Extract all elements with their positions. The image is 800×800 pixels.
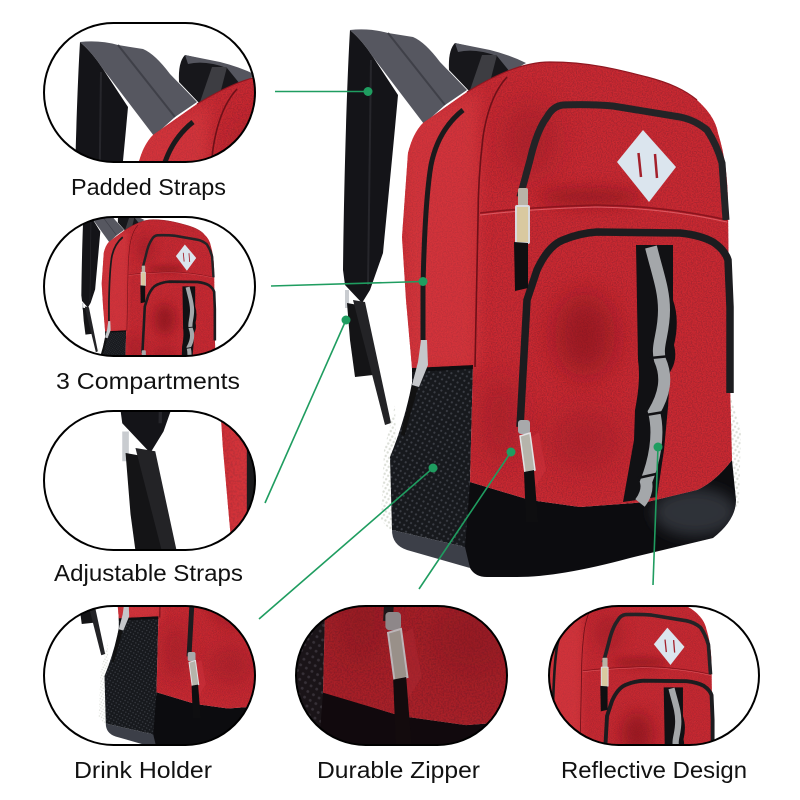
inset: drink holder bbox=[43, 605, 256, 746]
far shoulder strap bbox=[449, 43, 526, 92]
top zipper puller bbox=[514, 188, 529, 291]
label: drink holder: Drink Holder bbox=[74, 757, 212, 783]
leader line: reflective design bbox=[653, 442, 662, 585]
inset: 3 compartments bbox=[43, 216, 256, 357]
mesh fringe bbox=[381, 395, 741, 535]
grey fabric below mesh bbox=[392, 530, 470, 568]
near shoulder strap bbox=[343, 29, 467, 303]
label: reflective design: Reflective Design bbox=[561, 757, 747, 783]
black base bbox=[462, 460, 737, 577]
leader line: compartments bbox=[271, 277, 428, 286]
leader line: adjustable straps bbox=[265, 316, 350, 503]
front zipper puller bbox=[518, 420, 538, 522]
main backpack photo bbox=[343, 29, 741, 577]
label: durable zipper: Durable Zipper bbox=[317, 757, 480, 783]
front pocket zipper bbox=[520, 232, 730, 427]
top pocket zipper bbox=[520, 105, 726, 220]
leader line: drink holder bbox=[259, 464, 438, 619]
red fabric body bbox=[400, 62, 732, 507]
inset: durable zipper bbox=[295, 605, 508, 746]
reflective strip bbox=[623, 245, 677, 503]
side mesh pocket bbox=[390, 365, 473, 547]
leader line: padded straps bbox=[275, 87, 372, 96]
side zipper bbox=[423, 110, 463, 340]
adjustable webbing straps bbox=[345, 290, 391, 425]
leader line: durable zipper bbox=[419, 448, 516, 589]
inset: adjustable straps bbox=[43, 410, 256, 551]
side zipper puller bbox=[401, 340, 428, 436]
label: adjustable straps: Adjustable Straps bbox=[54, 560, 243, 586]
inset: padded straps bbox=[43, 22, 256, 163]
inset: reflective design bbox=[548, 605, 760, 746]
diamond logo patch bbox=[617, 130, 676, 202]
label: padded straps: Padded Straps bbox=[71, 174, 226, 200]
label: 3 compartments: 3 Compartments bbox=[56, 368, 240, 394]
